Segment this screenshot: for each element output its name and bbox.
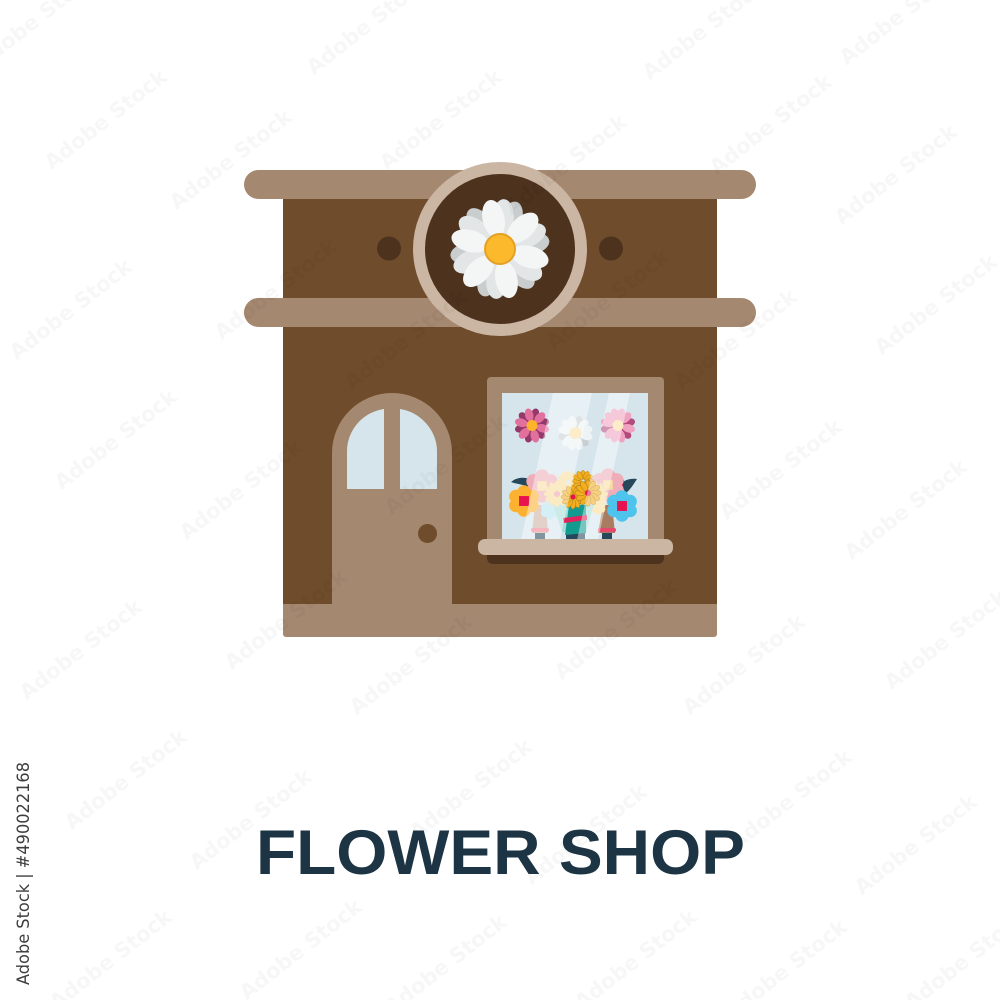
left vase — [532, 505, 548, 533]
watermark: Adobe Stock — [670, 284, 802, 395]
hanging flower: white — [558, 415, 593, 451]
watermark: Adobe Stock — [520, 779, 652, 890]
watermark: Adobe Stock — [40, 64, 172, 175]
left vase band — [531, 528, 549, 532]
window sill shadow — [487, 552, 664, 564]
title: FLOWER SHOP — [256, 818, 745, 888]
pale yellow flower — [591, 499, 605, 515]
watermark: Adobe Stock — [50, 384, 182, 495]
watermark: Adobe Stock — [542, 244, 674, 355]
watermark: Adobe Stock — [15, 594, 147, 705]
bouquet ribbon — [563, 515, 587, 523]
right vase stems — [602, 533, 612, 540]
bouquet wrap — [553, 504, 594, 532]
flower display — [509, 393, 637, 540]
right vase — [598, 505, 615, 533]
watermark: Adobe Stock — [725, 744, 857, 855]
right pink flower — [592, 468, 624, 502]
watermark: Adobe Stock — [500, 109, 632, 220]
watermark: Adobe Stock — [380, 409, 512, 520]
left vase stems — [535, 533, 545, 540]
window glass — [502, 393, 648, 540]
watermark: Adobe Stock — [60, 724, 192, 835]
watermark: Adobe Stock — [175, 434, 307, 545]
door knob — [418, 524, 437, 543]
pale blue flower — [541, 500, 559, 520]
hanging flower: rose — [600, 408, 636, 443]
watermark: Adobe Stock — [850, 789, 982, 900]
bouquet handle — [565, 505, 586, 535]
door right pane — [400, 409, 437, 489]
stock id: Adobe Stock | #490022168 — [14, 762, 34, 985]
watermark: Adobe Stock — [550, 574, 682, 685]
watermark: Adobe Stock — [220, 564, 352, 675]
left red flower — [527, 477, 538, 498]
cream daisies — [544, 471, 608, 507]
window frame — [487, 377, 664, 547]
left bouquet leaf — [511, 478, 530, 487]
glass reflections — [521, 393, 630, 540]
watermark: Adobe Stock — [705, 69, 837, 180]
shop window — [478, 377, 673, 564]
base plinth — [283, 604, 717, 637]
yellow flower — [509, 485, 539, 517]
building wall — [283, 190, 717, 610]
bouquet stems — [566, 530, 585, 540]
watermark: Adobe Stock — [210, 234, 342, 345]
watermark: Adobe Stock — [165, 104, 297, 215]
watermark: Adobe Stock — [185, 764, 317, 875]
round flower sign — [413, 162, 587, 336]
orange daisies — [561, 470, 601, 509]
watermark: Adobe Stock — [375, 64, 507, 175]
right vase band — [598, 528, 616, 532]
watermark: Adobe Stock — [715, 414, 847, 525]
door left pane — [347, 409, 384, 489]
watermark: Adobe Stock — [678, 609, 810, 720]
left pink flower — [526, 469, 558, 503]
daisy centres — [554, 490, 591, 500]
right wall lamp — [599, 236, 623, 260]
watermark: Adobe Stock — [840, 454, 972, 565]
watermark: Adobe Stock — [870, 249, 1000, 360]
window sill — [478, 539, 673, 555]
watermark: Adobe Stock — [830, 119, 962, 230]
left wall lamp — [377, 236, 401, 260]
watermark: Adobe Stock — [5, 254, 137, 365]
middle cornice — [244, 298, 756, 327]
watermark: Adobe Stock — [405, 734, 537, 845]
right red flower — [613, 472, 624, 495]
blue flower — [607, 490, 637, 522]
building — [244, 162, 756, 637]
right bouquet leaf — [620, 479, 637, 493]
watermark: Adobe Stock — [340, 284, 472, 395]
door — [332, 393, 452, 604]
upper cornice — [244, 170, 756, 199]
watermark: Adobe Stock — [345, 609, 477, 720]
icon: daisy — [449, 198, 551, 300]
hanging flower: pink — [514, 408, 550, 443]
